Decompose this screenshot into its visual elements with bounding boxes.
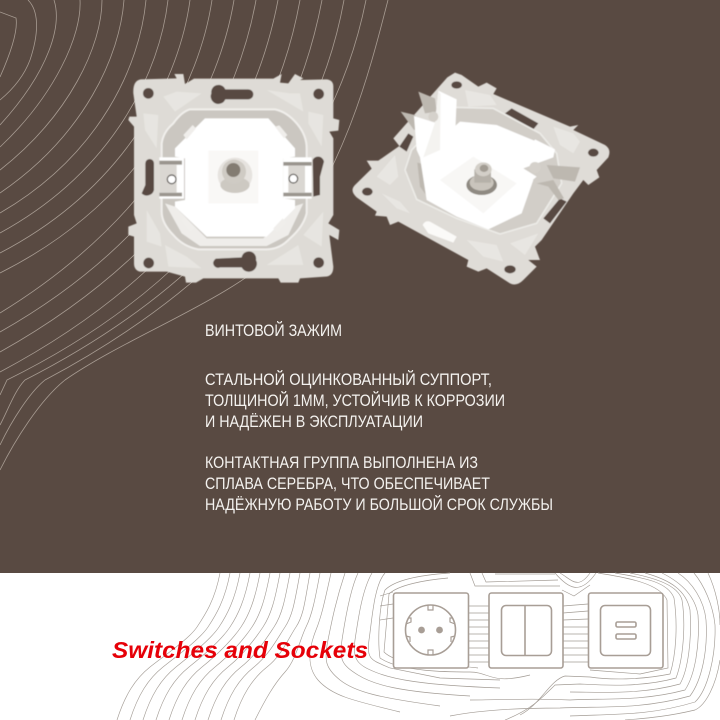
icon: power socket (394, 593, 468, 668)
white plastic body (414, 91, 555, 229)
mounting ring (405, 107, 562, 234)
coaxial connector (218, 158, 252, 193)
feature: galvanized steel support (205, 370, 505, 431)
device: angled view of TV socket mechanism (353, 73, 609, 284)
feature: galvanized steel support: И НАДЁЖЕН В ЭКСПЛУАТАЦИИ (205, 413, 423, 431)
coaxial connector (466, 162, 497, 195)
mounting holes and slots (362, 81, 599, 273)
icon: data outlet (588, 593, 663, 668)
feature: silver alloy contacts (205, 454, 553, 514)
heading: Switches and Sockets: Switches and Sockets (112, 637, 368, 663)
icon: double switch (489, 593, 563, 668)
terminals (401, 92, 580, 200)
right screw terminal (283, 157, 312, 199)
feature: silver alloy contacts: СПЛАВА СЕРЕБРА, ЧТО ОБЕСПЕЧИВАЕТ (205, 475, 490, 493)
left screw terminal (159, 157, 184, 199)
device: front view of TV socket mechanism (128, 74, 339, 283)
mounting holes and slots (142, 85, 324, 272)
text block: features (205, 321, 553, 514)
feature: galvanized steel support: СТАЛЬНОЙ ОЦИНКОВАННЫЙ СУППОРТ, (205, 370, 492, 389)
feature: silver alloy contacts: НАДЁЖНУЮ РАБОТУ И БОЛЬШОЙ СРОК СЛУЖБЫ (205, 495, 553, 514)
footer band (0, 573, 720, 720)
mounting frame (128, 74, 339, 283)
mounting ring (162, 109, 307, 249)
feature: silver alloy contacts: КОНТАКТНАЯ ГРУППА ВЫПОЛНЕНА ИЗ (205, 454, 478, 472)
feature: galvanized steel support: ТОЛЩИНОЙ 1ММ, УСТОЙЧИВ К КОРРОЗИИ (205, 391, 505, 410)
mounting frame (353, 73, 609, 284)
feature: screw clamp: ВИНТОВОЙ ЗАЖИМ (205, 321, 342, 340)
white octagonal body (175, 118, 295, 237)
